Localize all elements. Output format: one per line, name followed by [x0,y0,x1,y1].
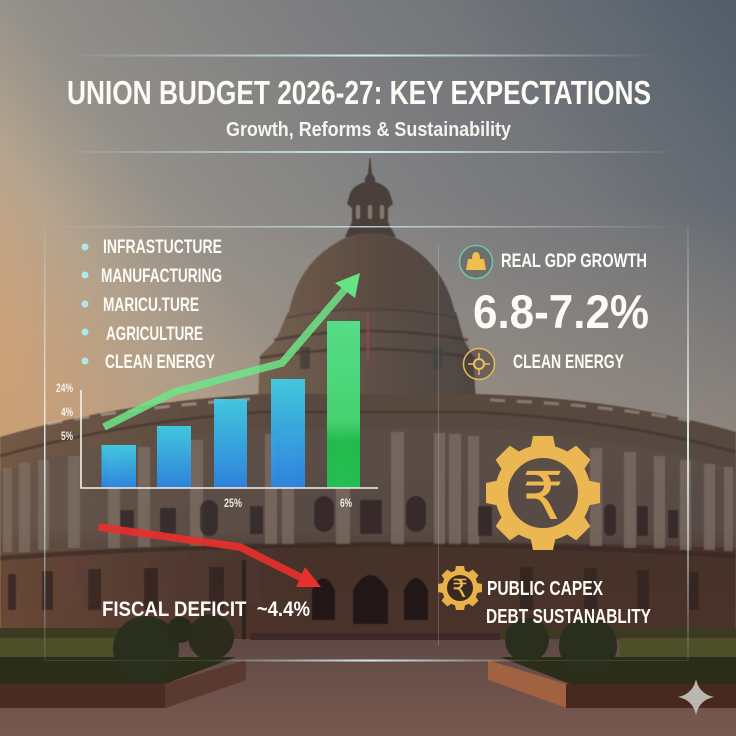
x axis labels [224,498,352,510]
label: clean energy: CLEAN ENERGY [105,352,215,373]
label: debt sustainability: DEBT SUSTANABLITY [486,606,652,628]
label: agriculture: AGRICULTURE [106,324,203,345]
x axis labels: 25% [224,498,242,510]
building: central dome [258,158,476,400]
y axis labels: 5% [61,431,73,443]
bullet: manufacturing [82,272,88,278]
bullet: infrastructure [82,244,88,250]
arrow: rising green trend [104,273,360,427]
icon: large rupee gear [486,436,600,550]
sector list [82,237,222,373]
bar chart [56,321,378,510]
bars [102,321,360,488]
subtitle: Growth, Reforms & Sustainability [226,119,512,141]
glass panel frame lines [44,54,689,662]
axes [81,390,378,488]
right planter with hedge and bushes [488,617,736,708]
bullet: clean energy [82,358,88,364]
icon: sparkle watermark [678,679,714,715]
icon: clean energy badge [464,348,494,380]
icon: real GDP growth badge [460,246,492,278]
building: curved colonnade wing [0,394,736,641]
key figure: GDP growth range: 6.8-7.2% [473,285,649,338]
x axis labels: 6% [340,498,352,510]
bullet: agriculture [82,328,88,336]
icon: small rupee gear [438,566,482,610]
y axis labels: 4% [61,407,73,419]
label: manufacturing: MANUFACTURING [101,266,222,287]
label: infrastructure: INFRASTUCTURE [103,237,222,258]
rupee symbol: ₹ [522,458,564,535]
ground: lawns and path [0,628,736,736]
callout: fiscal deficit: FISCAL DEFICIT ~4.4% [102,598,310,621]
arrow: falling red deficit [98,527,321,587]
label: clean energy: CLEAN ENERGY [513,352,624,373]
left planter with hedge and bushes [0,614,246,708]
label: mariculture: MARICU.TURE [103,295,199,316]
small rupee symbol: ₹ [452,574,468,603]
label: real GDP growth: REAL GDP GROWTH [501,250,647,272]
label: public capex: PUBLIC CAPEX [487,578,604,600]
y axis labels: 24% [56,383,73,395]
y axis labels [56,383,73,443]
bullet: mariculture [82,300,88,308]
